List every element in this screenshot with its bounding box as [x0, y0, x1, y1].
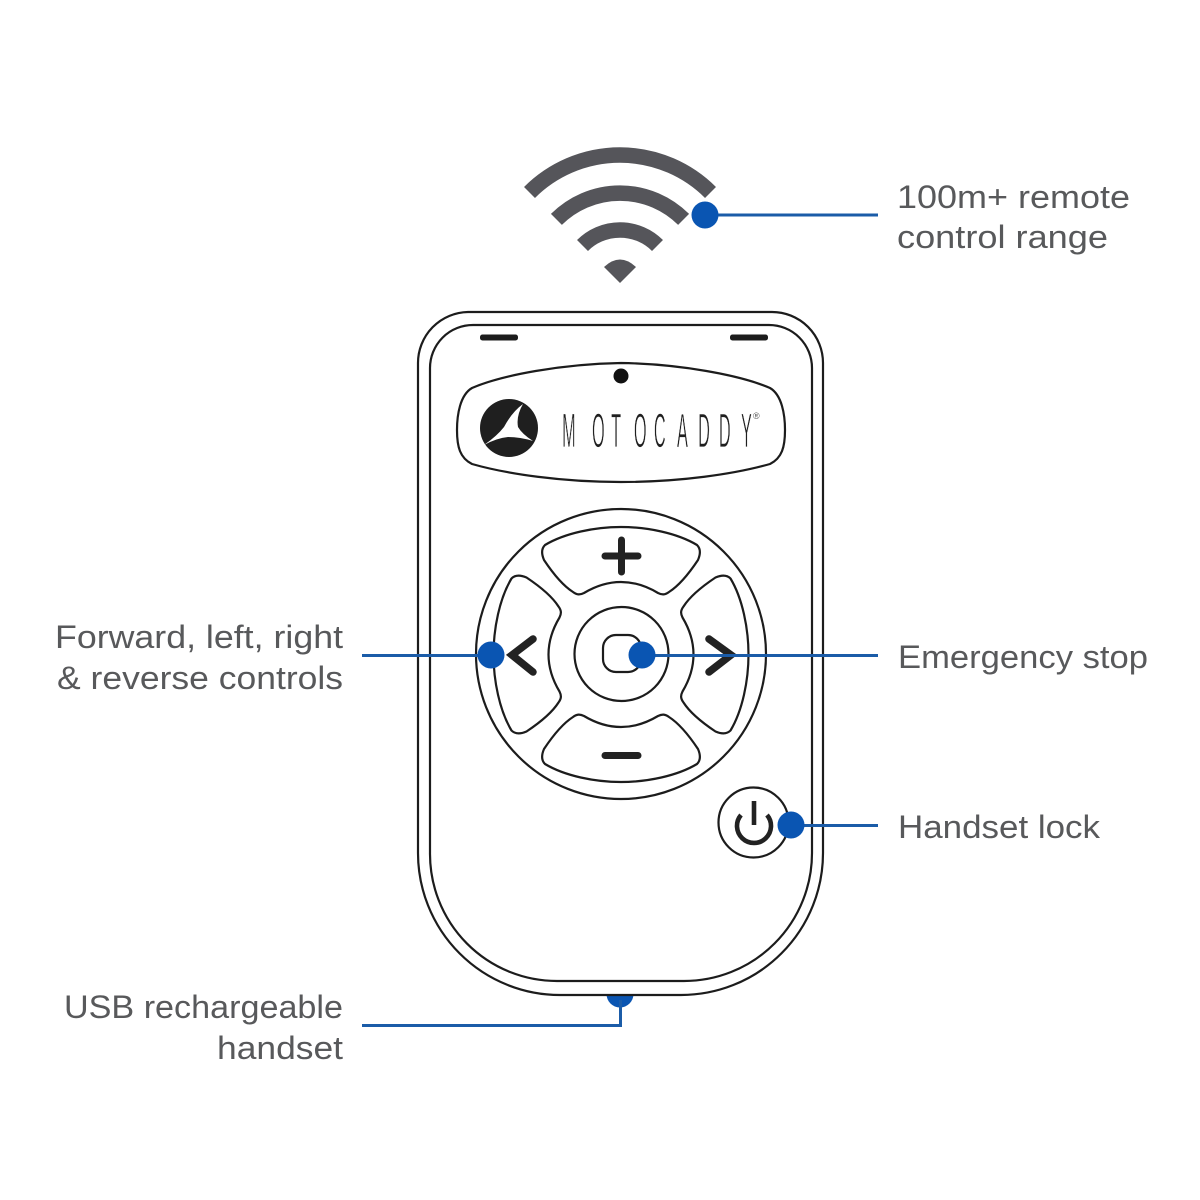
label: emergency stop: Emergency stop: [898, 639, 1148, 675]
centre ring: [574, 607, 668, 701]
icon: minus: [605, 752, 638, 759]
icon: wifi signal: [530, 155, 710, 283]
label: USB rechargeable: handset: [217, 1030, 343, 1066]
label: range: control range: [897, 219, 1108, 255]
control wheel: [476, 509, 766, 799]
icon: left chevron: [512, 639, 533, 672]
right button: [681, 576, 748, 733]
icon: plus: [605, 540, 638, 572]
handset outer shell: [418, 312, 823, 995]
callout: emergency stop: [628, 639, 1148, 675]
wheel outer ring: [476, 509, 766, 799]
label: direction controls: Forward, left, right: [55, 619, 343, 655]
top slot left: [480, 334, 518, 340]
minus button: [542, 715, 700, 782]
marker: USB port: [362, 994, 634, 1026]
label: USB rechargeable: USB rechargeable: [64, 989, 343, 1025]
left button: [494, 576, 561, 733]
handset inner face: [430, 325, 812, 981]
logo plate: [457, 363, 785, 482]
label: range: 100m+ remote: [897, 179, 1130, 215]
label: direction controls: & reverse controls: [57, 660, 343, 696]
stop button: [603, 635, 641, 672]
icon: right chevron: [709, 639, 731, 672]
callout: handset lock: [778, 809, 1101, 845]
logo: Motocaddy mark: [480, 399, 538, 457]
indicator light: [614, 368, 628, 384]
plus button: [542, 527, 700, 594]
handset body: [418, 312, 823, 995]
power button: [718, 788, 788, 858]
callout: direction controls: [55, 619, 504, 696]
registered mark: ®: [753, 411, 760, 421]
top slot right: [730, 334, 768, 340]
callout: range: [692, 179, 1130, 255]
label: handset lock: Handset lock: [898, 809, 1101, 845]
icon: power: [737, 801, 771, 843]
logo wordmark: MOTOCADDY: [562, 404, 752, 458]
